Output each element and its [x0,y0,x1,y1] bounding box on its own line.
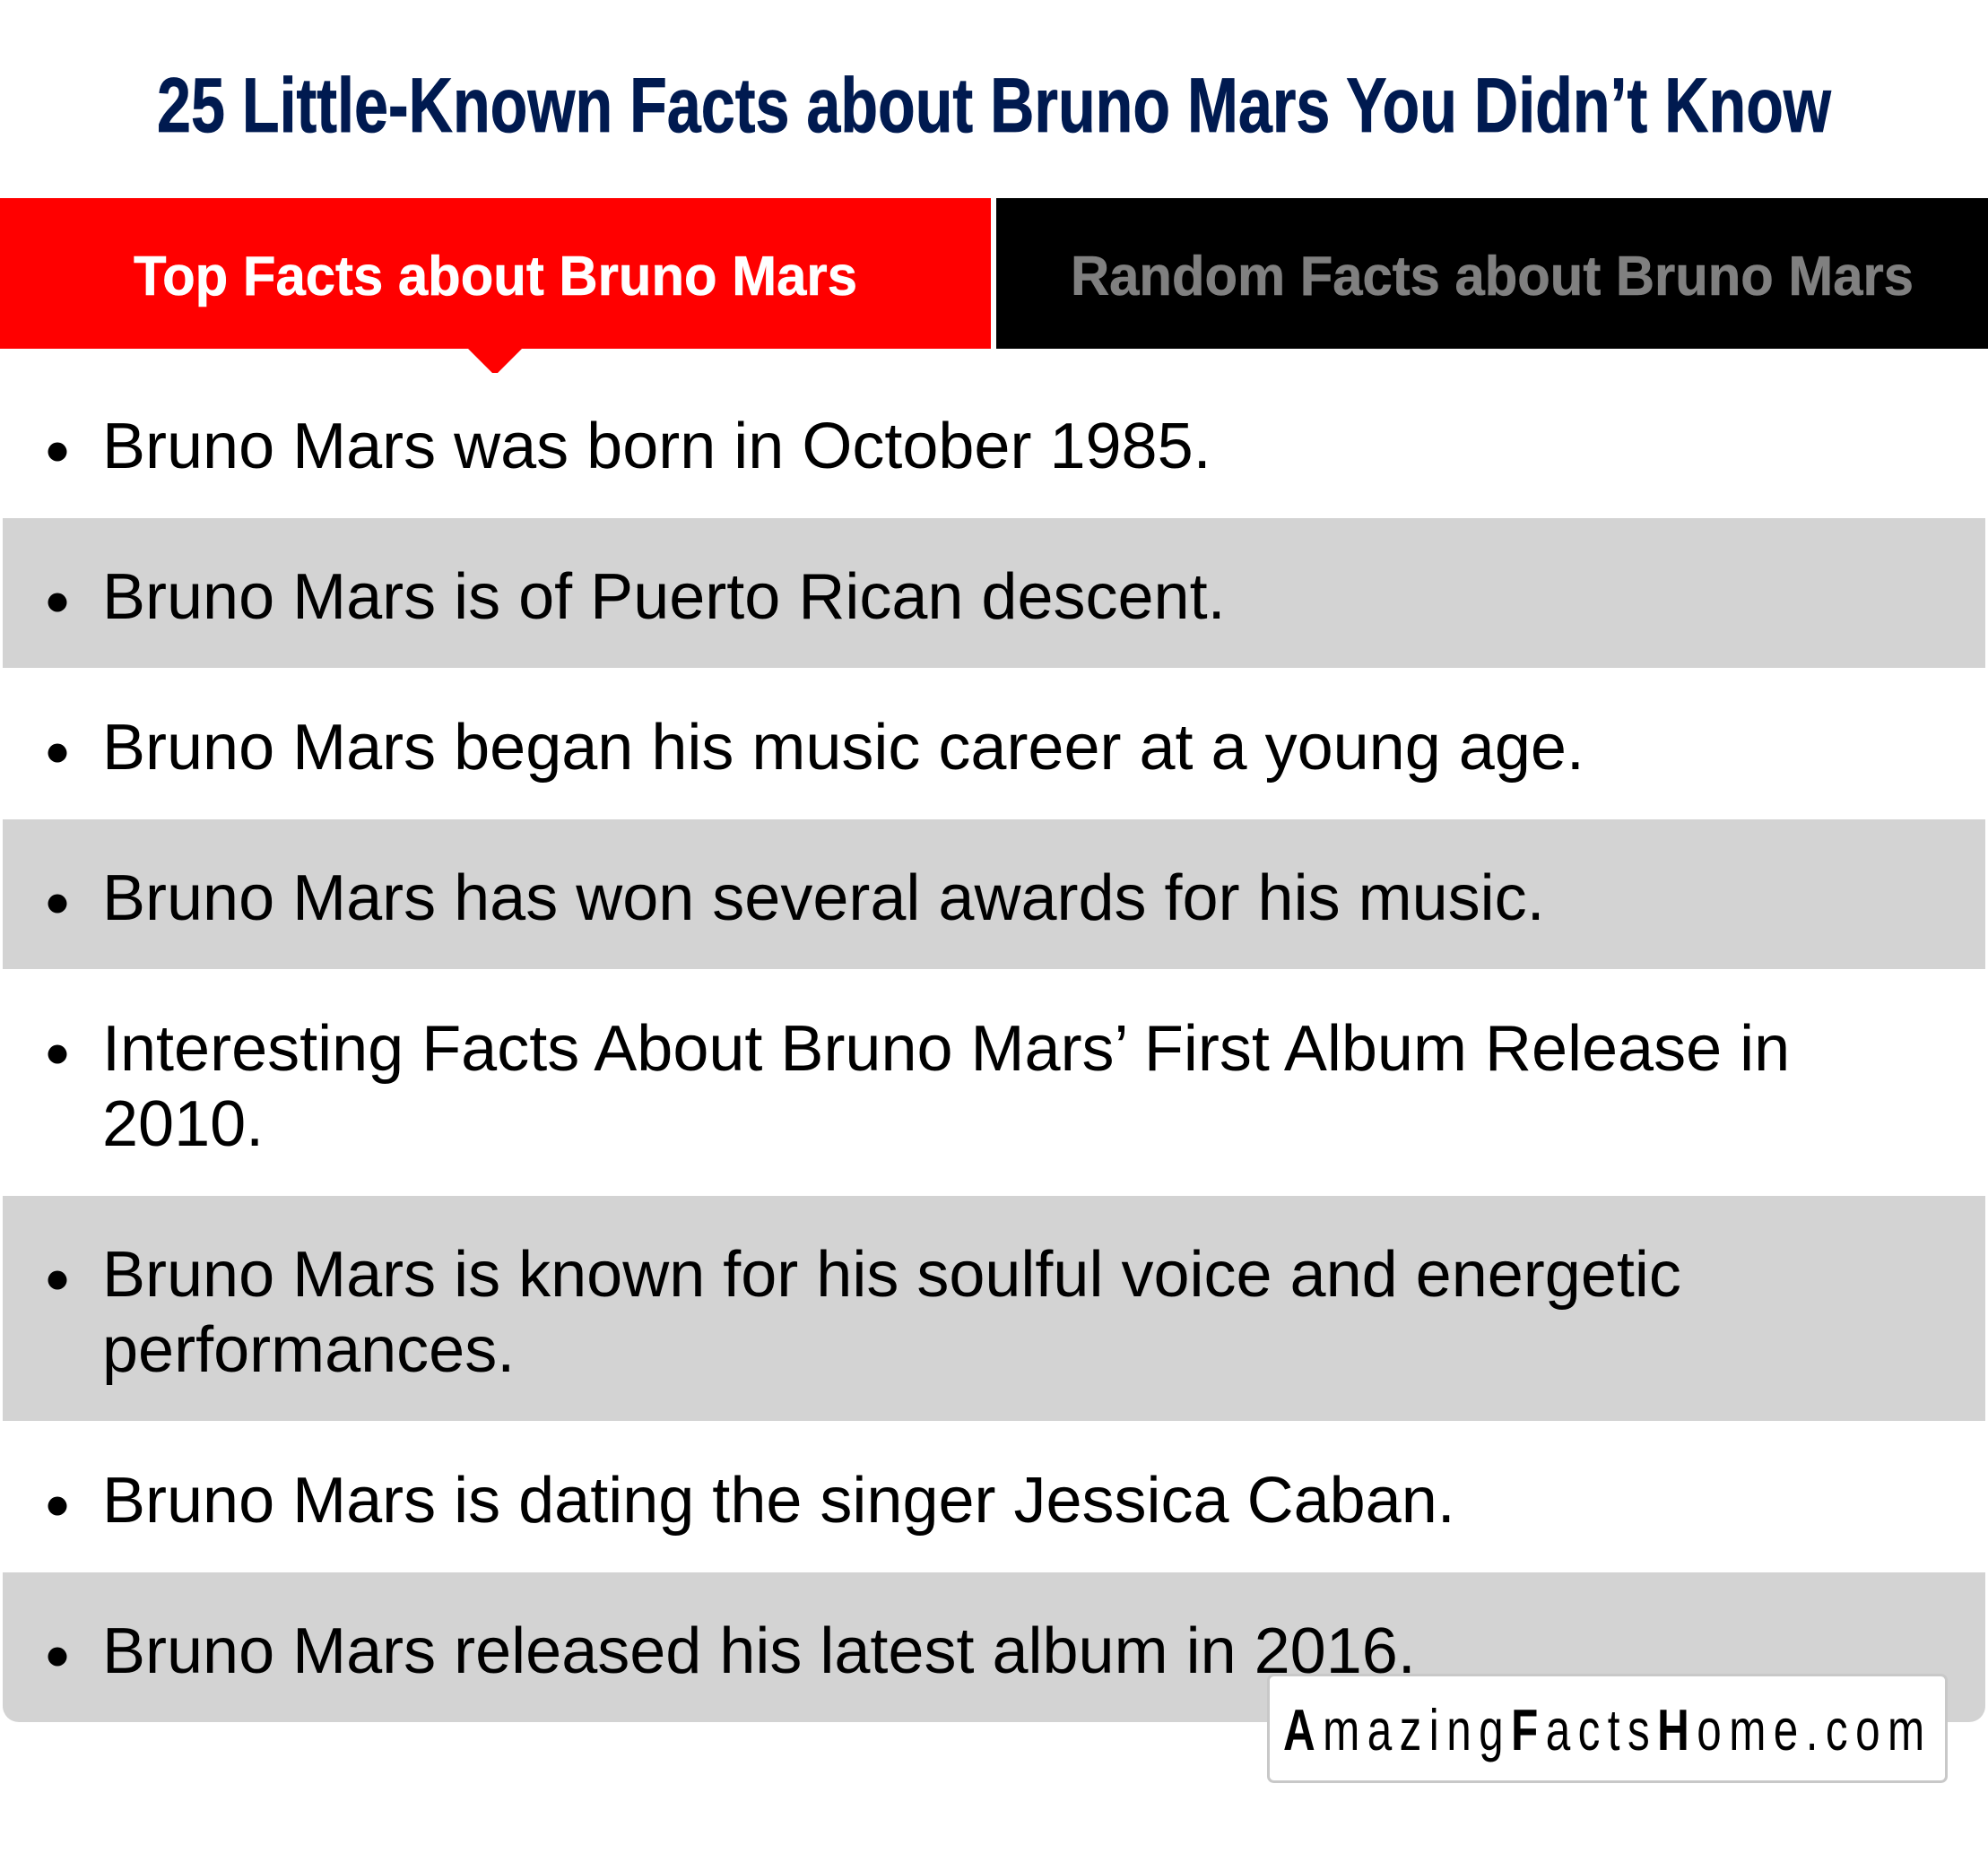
fact 1: Bruno Mars was born in October 1985. [102,411,1211,482]
fact 4: Bruno Mars has won several awards for his music. [102,862,1545,934]
watermark: AmazingFactsHome.com [1268,1675,1946,1782]
fact 4 [3,819,1985,969]
fact 8 [3,1572,1985,1722]
fact 6 [3,1196,1985,1421]
tab: random facts (inactive) [996,198,1988,349]
tab: top facts (active) [0,198,991,373]
watermark: AmazingFactsHome.com: AmazingFactsHome.com [1283,1699,1924,1763]
fact 6: Bruno Mars is known for his soulful voice and energetic [102,1239,1681,1311]
fact 8: Bruno Mars released his latest album in 2016. [102,1615,1416,1687]
fact 5 [48,1013,1790,1160]
tab: top facts (active): Top Facts about Bruno Mars [134,246,857,307]
tab: random facts (inactive): Random Facts about Bruno Mars [1071,246,1914,307]
fact 6: performances. [102,1314,515,1386]
fact 5: 2010. [102,1088,264,1160]
fact 7: Bruno Mars is dating the singer Jessica Caban. [102,1465,1455,1537]
fact 3: Bruno Mars began his music career at a young age. [102,712,1584,784]
fact 5: Interesting Facts About Bruno Mars’ First Album Release in [102,1013,1790,1085]
fact 2 [3,518,1985,668]
fact 2: Bruno Mars is of Puerto Rican descent. [102,561,1226,633]
